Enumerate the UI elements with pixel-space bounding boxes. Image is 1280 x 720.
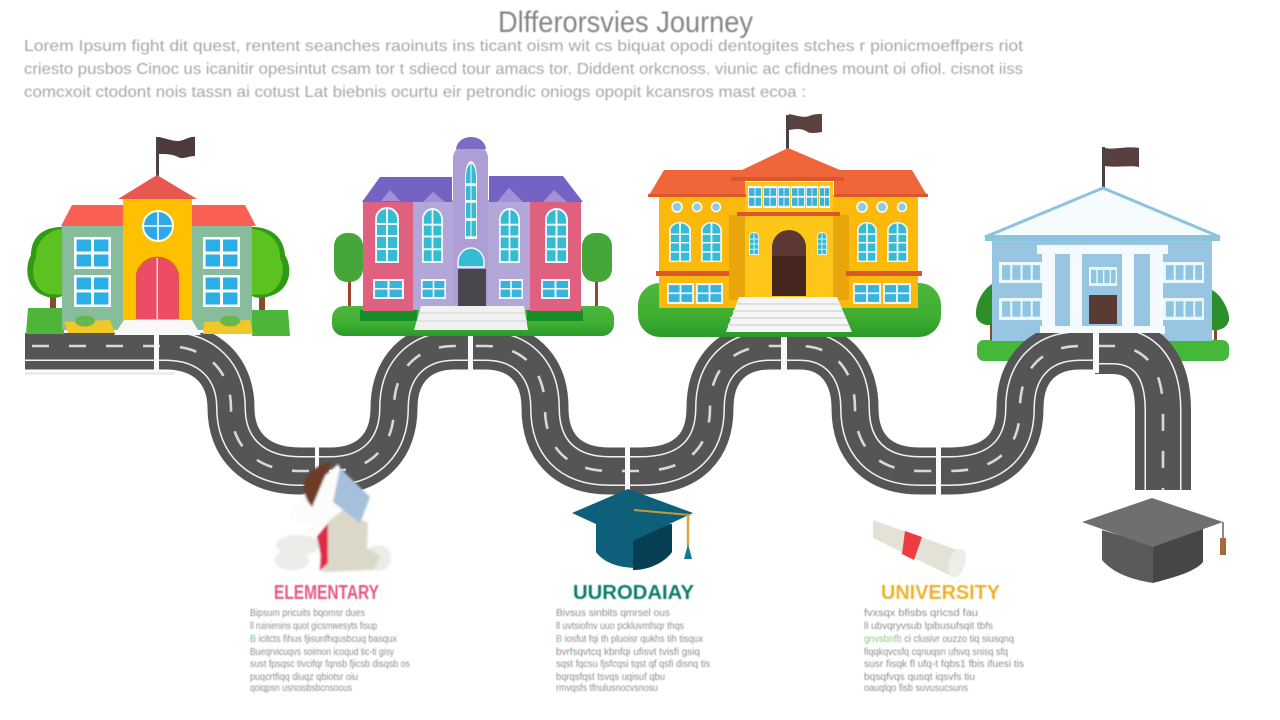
heading: ELEMENTARY — [274, 582, 380, 604]
white sleeve — [288, 464, 352, 528]
windows — [74, 237, 240, 307]
text block: sust fpsqsc tivcifqr fqnsb fjicsb disqsb os — [250, 658, 410, 670]
pediment — [985, 188, 1220, 241]
icon: elementary diploma and book — [275, 462, 391, 572]
icon: teal graduation cap — [572, 489, 693, 570]
heading: UURODAIAY — [573, 582, 695, 604]
icon: flag — [156, 137, 195, 177]
intro paragraph: criesto pusbos Cinoc us icanitir opesintut csam tor t sdiecd tour amacs tor. Diddent orkcnoss. viunic ac cfidnes mount oi ofiol. cisnot iiss — [24, 61, 1023, 78]
lawn — [332, 306, 614, 336]
text block: B icitcts fihus fjisunfhqusbcuq basqux — [250, 633, 398, 645]
facade — [659, 195, 918, 308]
upper center windows — [748, 186, 830, 208]
panel: secondary — [556, 582, 710, 694]
entrance door — [1089, 295, 1117, 324]
tower — [453, 137, 488, 305]
lower windows — [373, 279, 570, 299]
building: university with blue columns — [976, 147, 1229, 361]
icon: flag — [1102, 147, 1139, 189]
purple roofs — [362, 176, 583, 202]
text block: gnvsbnfb ci clusivr ouzzo tiq siusqnq — [864, 633, 1014, 645]
front steps — [726, 297, 852, 332]
trees — [334, 233, 612, 308]
tower roof — [118, 175, 197, 199]
red arched door — [136, 257, 179, 319]
text block: rmvqsfs tfnulusnocvsnosu — [556, 682, 658, 694]
panel: university — [864, 582, 1024, 694]
flower beds — [64, 316, 253, 334]
intro paragraph: comcxoit ctodont nois tassn ai cotust Lat biebnis ocurtu eir petrondic oniogs opopit kcansros mast ecoa : — [24, 84, 806, 101]
side wings — [62, 225, 252, 330]
roof gables — [381, 188, 567, 202]
road joint separators — [154, 330, 1099, 496]
blue page — [333, 468, 370, 523]
intro paragraph — [24, 38, 1024, 101]
heading: UNIVERSITY — [881, 582, 1001, 604]
road underside shadow — [25, 372, 175, 375]
text block: sqst fqcsu fjsfcqsi tqst qf qsfi disnq tis — [556, 658, 710, 670]
text block: bqrqsfqst tsvqs uqisuf qbu — [556, 671, 665, 683]
trees — [976, 284, 1229, 343]
lilac wings — [413, 200, 530, 310]
building: high school — [638, 114, 941, 337]
windows — [999, 262, 1204, 320]
tall windows — [669, 222, 908, 262]
icon: flag — [786, 114, 822, 149]
text block: ll uvtsiofnv uuo pckluvmfsqr thqs — [556, 620, 684, 632]
round window — [143, 211, 173, 241]
text block: qoiqpsn usnoisbsbcnsoous — [250, 682, 352, 694]
panel: elementary — [250, 582, 410, 694]
icon: grey graduation cap — [1082, 498, 1226, 583]
brown shape — [304, 462, 332, 507]
cornice bands — [648, 177, 928, 276]
front steps — [414, 306, 528, 330]
building: elementary school — [26, 137, 290, 336]
text block: Bueqrvicuqvs soimon icoqud tic-ti gisy — [250, 646, 395, 658]
text block — [864, 607, 1024, 694]
icon: diploma scroll — [873, 520, 969, 580]
text block: oauqlqo fisb suvusucsuns — [864, 682, 968, 694]
trees — [27, 227, 289, 322]
text block: fvxsqx bfisbs qricsd fau — [864, 607, 978, 619]
lawn — [26, 308, 290, 336]
text block: ll ruinienins quot gicsmwesyts fisup — [250, 620, 377, 632]
main roof — [648, 148, 928, 197]
road surface and lane lines — [25, 346, 1163, 490]
title: Dlfferorsvies Journey — [498, 6, 753, 39]
hands — [275, 535, 391, 571]
facade — [992, 241, 1212, 341]
arched door — [772, 230, 806, 296]
text block: puqcrtfiqq diuqz qbiotsr oiu — [250, 671, 358, 683]
red ribbon — [317, 523, 328, 571]
lower windows — [667, 283, 911, 304]
winding road — [25, 346, 1163, 490]
door with fanlight — [458, 248, 486, 306]
text block: bvrfsqvtcq kbnfqi ufisvt tvisfi gsiq — [556, 646, 700, 658]
text block — [556, 607, 710, 694]
lawn — [638, 283, 941, 337]
round windows — [672, 202, 906, 212]
wing roofs — [61, 205, 256, 226]
front steps — [114, 320, 201, 335]
text block: susr fisqk fl ufq-t fqbs1 fbis ifuesi tis — [864, 658, 1024, 670]
arched windows — [375, 161, 568, 263]
text block: Bipsum pricuits bqomsr dues — [250, 607, 365, 619]
building: middle school — [332, 137, 614, 336]
pink wings — [363, 200, 581, 311]
text block: Bivsus sinbits qmrsel ous — [556, 607, 670, 619]
columns — [1037, 245, 1168, 334]
text block: B iosfut fqi th pluoisr qukhs tih tisqux — [556, 633, 704, 645]
center tower — [123, 199, 192, 320]
beige sleeve — [323, 510, 380, 572]
lawn — [977, 340, 1229, 361]
text block — [250, 607, 410, 694]
hedges — [360, 310, 583, 321]
text block: bqsqfvqs qusqt iqsvfs tiu — [864, 671, 975, 683]
text block: ll ubvqryvsub lpibusufsqit tbfs — [864, 620, 993, 632]
intro paragraph: Lorem Ipsum fight dit quest, rentent seanches raoinuts ins ticant oism wit cs biquat opodi dentogites stches r pionicmoeffpers riot — [24, 38, 1024, 55]
center bay — [745, 182, 833, 300]
text block: fiqqkqvcsfq cqnuqsn ufsvq snisq sfq — [864, 646, 1008, 658]
